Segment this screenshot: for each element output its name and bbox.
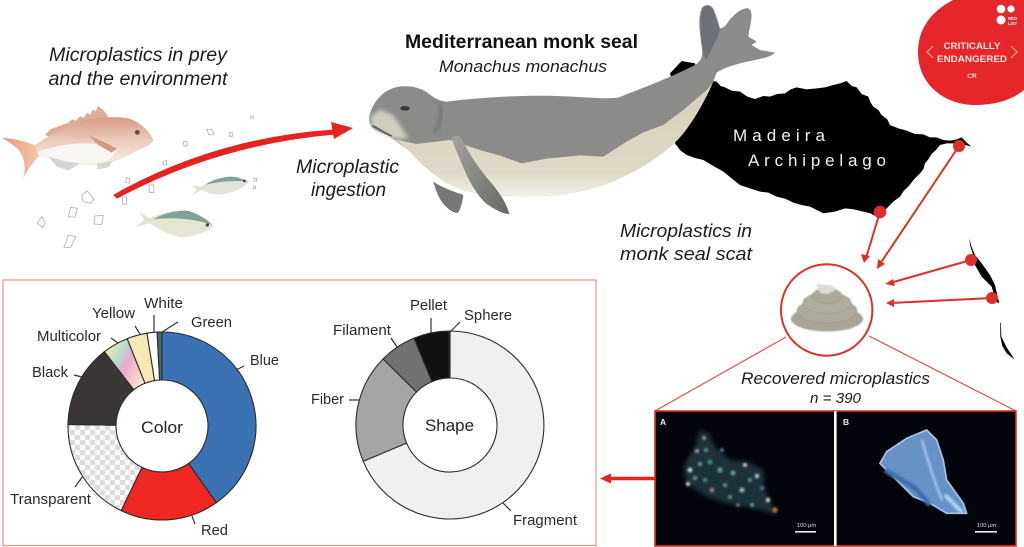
color legend labels: Yellow bbox=[92, 306, 136, 322]
icon: red list logo: LIST bbox=[1008, 21, 1018, 26]
badge text bbox=[937, 41, 1007, 80]
heading: species name: Mediterranean monk seal bbox=[405, 32, 638, 53]
label: microplastics in monk seal scat: monk seal scat bbox=[620, 243, 753, 264]
seal mouth shadow bbox=[373, 126, 392, 136]
photo B: blue particle bbox=[880, 430, 967, 513]
seal neck crease bbox=[433, 103, 441, 133]
color legend labels: Red bbox=[201, 523, 228, 539]
panel: chart container bbox=[3, 280, 596, 546]
map: Desertas islands bbox=[969, 238, 1015, 360]
zoom connector lines bbox=[655, 336, 1016, 411]
chart: color donut bbox=[10, 296, 279, 539]
shape legend labels: Fragment bbox=[513, 513, 577, 529]
label: microplastic ingestion: Microplastic bbox=[296, 157, 399, 178]
illustration: microplastic particles bbox=[37, 116, 257, 247]
illustration: large red fish bbox=[2, 106, 153, 178]
illustration: monk seal bbox=[369, 5, 775, 214]
shape legend labels: Filament bbox=[333, 323, 391, 339]
color legend labels: Multicolor bbox=[37, 329, 101, 345]
label: Madeira Archipelago bbox=[733, 126, 886, 170]
shape legend labels: Sphere bbox=[464, 308, 512, 324]
arrow: photos to charts bbox=[600, 474, 655, 484]
seal rear flipper bbox=[433, 182, 463, 213]
seal tail dark fluke bbox=[700, 6, 720, 59]
scale bars: 100 µm bbox=[977, 523, 996, 529]
seal body bbox=[369, 5, 775, 196]
heading: microplastics in prey: Microplastics in prey bbox=[49, 45, 229, 66]
scale bars bbox=[795, 523, 997, 533]
photo panel A and B bbox=[655, 411, 1016, 546]
label: recovered microplastics: n = 390 bbox=[810, 391, 861, 407]
badge text: ENDANGERED bbox=[937, 54, 1007, 65]
shape legend labels: Fiber bbox=[311, 392, 344, 408]
seal belly bbox=[395, 83, 713, 196]
arrow: microplastic ingestion bbox=[114, 122, 353, 198]
label: microplastics in monk seal scat bbox=[620, 220, 753, 264]
color leader lines bbox=[74, 315, 244, 524]
scale bars: 100 µm bbox=[797, 523, 816, 529]
color legend labels: Green bbox=[191, 315, 232, 331]
label: recovered microplastics bbox=[741, 369, 930, 407]
color legend labels: Blue bbox=[250, 353, 279, 369]
icon: scat in circle bbox=[781, 264, 872, 356]
badge text: CRITICALLY bbox=[944, 41, 1001, 52]
label: recovered microplastics: Recovered microplastics bbox=[741, 369, 930, 388]
illustration: small fish upper bbox=[192, 177, 249, 195]
color legend labels: White bbox=[144, 296, 183, 312]
label: shape: Shape bbox=[425, 416, 474, 435]
map: Madeira island bbox=[670, 61, 972, 217]
heading: microplastics in prey: and the environment bbox=[48, 69, 228, 90]
label: color: Color bbox=[141, 418, 183, 437]
photo A: iridescent particle bbox=[660, 417, 849, 515]
color legend labels: Transparent bbox=[10, 492, 91, 508]
label: microplastic ingestion bbox=[296, 157, 399, 201]
arrows: sampling sites to scat bbox=[861, 140, 998, 307]
badge: IUCN critically endangered bbox=[918, 0, 1024, 105]
badge text: CR bbox=[967, 73, 977, 80]
label: Madeira Archipelago: Archipelago bbox=[748, 151, 886, 170]
heading: microplastics in prey bbox=[48, 45, 229, 90]
heading: species name bbox=[405, 32, 638, 76]
illustration: small fish lower bbox=[136, 210, 213, 237]
photo A: iridescent particle: B bbox=[843, 417, 849, 427]
label: Madeira Archipelago: Madeira bbox=[733, 126, 826, 145]
label: microplastic ingestion: ingestion bbox=[311, 180, 386, 201]
label: microplastics in monk seal scat: Microplastics in bbox=[620, 220, 752, 241]
shape legend labels: Pellet bbox=[410, 298, 447, 314]
heading: species name: Monachus monachus bbox=[439, 57, 608, 76]
photo A: iridescent particle: A bbox=[660, 417, 666, 427]
seal eye bbox=[400, 106, 410, 111]
shape legend labels bbox=[311, 298, 577, 529]
seal front flipper bbox=[452, 136, 509, 214]
seal muzzle bbox=[371, 109, 408, 139]
icon: red list logo: RED bbox=[1008, 16, 1017, 21]
color legend labels bbox=[10, 296, 279, 539]
color legend labels: Black bbox=[32, 365, 69, 381]
chart: shape donut bbox=[311, 298, 577, 529]
icon: red list logo bbox=[996, 5, 1018, 26]
shape leader lines bbox=[349, 318, 511, 511]
